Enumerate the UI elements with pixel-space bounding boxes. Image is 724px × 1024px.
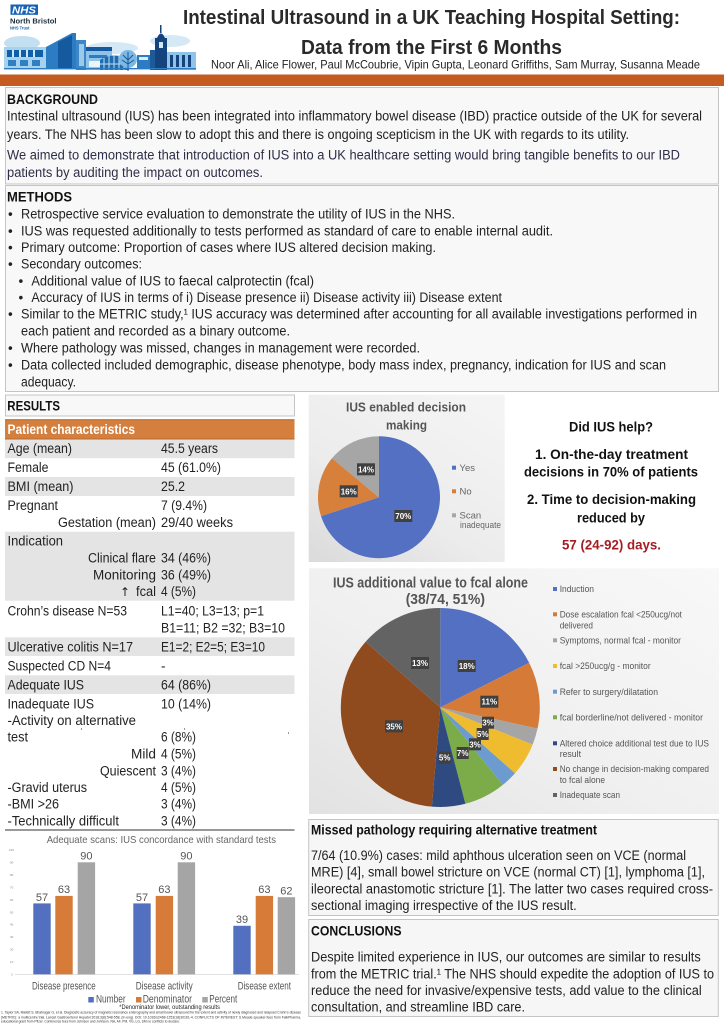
panel: missed pathology: [309, 820, 718, 916]
pie value labels: 5%: [477, 730, 488, 739]
table: patient characteristics: [5, 419, 294, 830]
table header: Patient characteristics: [8, 422, 135, 437]
table rows: ↑: [120, 585, 130, 599]
table rows: Adequate IUS: [8, 677, 84, 692]
chart: IUS enabled decision making pie: [309, 395, 505, 562]
table rows: 34 (46%): [161, 551, 211, 566]
pie title: [333, 575, 528, 608]
pie legend: fcal borderline/not delivered - monitor: [560, 712, 703, 724]
orange header band: [0, 74, 724, 86]
list: methods bullets: •: [8, 357, 13, 372]
authors: Noor Ali, Alice Flower, Paul McCoubrie, Vipin Gupta, Leonard Griffiths, Sam Murray, Susanna Meade: [211, 57, 700, 71]
pie legend: Dose escalation fcal <250ucg/not: [560, 610, 682, 620]
y axis ticks: 50: [10, 910, 14, 914]
pie value labels: 3%: [469, 740, 481, 749]
pie legend: Inadequate scan: [560, 790, 620, 801]
y axis ticks: 20: [10, 948, 14, 952]
bars: disease activity: Disease activity: [136, 980, 193, 992]
text: background body: Intestinal ultrasound (IUS) has been integrated into inflammatory bowel disease (IBD) practice outside of the UK for several: [7, 109, 702, 124]
text: conclusions body: [311, 949, 714, 1015]
pie title: IUS enabled decision: [346, 400, 466, 415]
pie value labels: 35%: [386, 722, 402, 731]
trust name: North Bristol: [10, 16, 56, 25]
table rows: -: [161, 659, 166, 674]
pie value labels: 18%: [459, 662, 475, 671]
pie legend: result: [560, 749, 581, 760]
heading box: results: [6, 395, 294, 416]
table rows: [8, 441, 285, 828]
text: missed pathology body: ileorectal anastomotic stricture [1]. The latter two cases required cross-: [311, 881, 713, 896]
list: methods bullets: Similar to the METRIC study,¹ IUS accuracy was determined after accounting for all available investigations performed in: [21, 307, 697, 322]
text: missed pathology body: [311, 848, 713, 913]
pie value labels: 14%: [358, 465, 374, 474]
pie legend: delivered: [560, 620, 593, 631]
bars: disease activity: 63: [158, 884, 171, 896]
pie value labels: 11%: [482, 698, 497, 707]
bars: disease extent: [233, 884, 295, 992]
table rows: 29/40 weeks: [161, 515, 233, 530]
y axis ticks: 70: [10, 886, 14, 890]
table rows: BMI (mean): [8, 479, 74, 494]
references and conflicts of interest: educational grant from Pfizer. Conference fees from Johnson and Johnson. NA, AF, PM, VG, LG, SM no conflicts to declare.: [1, 1020, 180, 1024]
list: methods bullets: Retrospective service evaluation to demonstrate the utility of IUS in the NHS.: [21, 206, 455, 221]
table rows: Quiescent: [100, 763, 156, 778]
bars: disease presence: 63: [58, 884, 70, 896]
table rows: 3 (4%): [161, 797, 196, 812]
table rows: 4 (5%): [161, 780, 196, 795]
pie title: IUS additional value to fcal alone: [333, 575, 528, 591]
chart: IUS additional value to fcal pie: [309, 568, 719, 814]
table rows: 6 (8%): [161, 730, 196, 745]
heading: background: BACKGROUND: [7, 91, 98, 107]
bars: disease presence: 57: [36, 892, 48, 904]
pie legend: Scan: [460, 510, 481, 522]
pie value labels: 7%: [457, 749, 468, 758]
bars: disease activity: 90: [180, 850, 193, 862]
list: methods bullets: •: [18, 290, 24, 305]
chart title: Adequate scans: IUS concordance with standard tests: [47, 834, 276, 846]
table rows: 7 (9.4%): [161, 498, 207, 513]
table rows: 4 (5%): [161, 584, 196, 599]
table rows: -Gravid uterus: [8, 780, 87, 795]
table rows: 3 (4%): [161, 813, 196, 828]
table rows: Mild: [131, 747, 156, 762]
list: methods bullets: each patient and recorded as a binary outcome.: [21, 323, 290, 338]
table rows: 64 (86%): [161, 677, 211, 692]
table rows: Monitoring: [93, 567, 156, 582]
y axis ticks: 10: [10, 960, 14, 964]
pie legend: inadequate: [460, 520, 501, 531]
text: missed pathology body: 7/64 (10.9%) cases: mild aphthous ulceration seen on VCE (normal: [311, 848, 686, 863]
list: methods bullets: Where pathology was missed, changes in management were recorded.: [21, 341, 420, 356]
title: Data from the First 6 Months: [301, 36, 562, 59]
table rows: Indication: [8, 533, 63, 548]
text: conclusions body: Despite limited experience in IUS, our outcomes are similar to results: [311, 949, 701, 964]
heading: conclusions: CONCLUSIONS: [311, 922, 402, 938]
table rows: Inadequate IUS: [8, 696, 94, 711]
list: methods bullets: •: [8, 223, 13, 238]
pie legend: [553, 584, 709, 801]
table rows: 4 (5%): [161, 747, 196, 762]
callout: did IUS help: 57 (24-92) days.: [562, 537, 661, 552]
heading box: results: RESULTS: [7, 398, 60, 414]
chart footnote: *Denominator lower, outstanding results: [119, 1005, 220, 1011]
list: methods bullets: Additional value of IUS to faecal calprotectin (fcal): [31, 273, 314, 288]
table rows: test: [8, 730, 28, 745]
list: methods bullets: adequacy.: [21, 375, 76, 390]
pie value labels: 5%: [439, 754, 450, 763]
table header: [5, 419, 294, 440]
pie legend: to fcal alone: [560, 775, 605, 786]
text: aim: patients by auditing the impact on outcomes.: [7, 165, 263, 180]
list: methods bullets: •: [8, 240, 13, 255]
y axis ticks: 90: [10, 860, 14, 864]
callout: did IUS help: decisions in 70% of patients: [524, 465, 698, 480]
logo: North Bristol NHS Trust: [4, 4, 196, 71]
heading: methods: METHODS: [7, 189, 72, 205]
callout: did IUS help: 1. On-the-day treatment: [535, 447, 689, 462]
chart: IUS concordance bar chart: [9, 834, 299, 1011]
table rows: 36 (49%): [161, 567, 211, 582]
y axis ticks: 100: [9, 848, 14, 852]
callout: did IUS help: Did IUS help?: [569, 420, 653, 435]
table rows: -BMI >26: [8, 797, 59, 812]
pie legend: Induction: [560, 584, 594, 595]
y axis ticks: 40: [10, 923, 14, 927]
y axis ticks: 60: [10, 898, 14, 902]
pie value labels: 3%: [482, 719, 494, 728]
table rows: -Technically difficult: [8, 813, 119, 828]
text: background body: years. The NHS has been slow to adopt this and there is ongoing scepticism in the UK with regards to its utility.: [7, 127, 629, 142]
table rows: Ulcerative colitis N=17: [8, 639, 133, 654]
callout: did IUS help: reduced by: [577, 511, 645, 526]
panel: conclusions: [309, 920, 718, 1016]
pie slices: [341, 608, 540, 807]
references and conflicts of interest: (METRIC): a multicentre trial. Lancet Gastroenterol Hepatol 2018;3(8):548-558. (In eng). DOI: 10.1016/s2468-1253(18)30161-4. CONFLICTS OF INTEREST: S.Meade speaker fees from FalkPharma,: [1, 1015, 301, 1019]
pie legend: No: [460, 486, 472, 498]
text: background body: [7, 109, 702, 142]
table rows: Female: [8, 460, 48, 475]
references and conflicts of interest: [1, 1011, 301, 1024]
y axis ticks: [9, 848, 14, 976]
list: methods bullets: •: [8, 257, 13, 272]
list: methods bullets: •: [18, 273, 24, 288]
table rows: 25.2: [161, 479, 185, 494]
text: missed pathology body: sectional imaging irrespective of the IUS result.: [311, 898, 577, 913]
callout: did IUS help: [524, 420, 698, 552]
pie legend: Refer to surgery/dilatation: [560, 687, 658, 698]
title: Intestinal Ultrasound in a UK Teaching Hospital Setting:: [183, 6, 680, 29]
bars: disease activity: 57: [136, 892, 148, 904]
text: missed pathology body: MRE) [4], small bowel stricture on VCE (normal CT) [1], lymphoma [1],: [311, 865, 705, 880]
table rows: Age (mean): [8, 441, 72, 456]
y axis ticks: 0: [11, 972, 13, 976]
pie value labels: 16%: [341, 487, 357, 496]
title: [183, 6, 680, 59]
list: methods bullets: [8, 206, 697, 390]
list: methods bullets: Accuracy of IUS in terms of i) Disease presence ii) Disease activity iii) Disease extent: [31, 290, 502, 305]
text: conclusions body: reduce the need for invasive/expensive tests, add value to the clinical: [311, 983, 702, 998]
list: methods bullets: •: [8, 341, 13, 356]
list: methods bullets: •: [8, 307, 13, 322]
table rows: 3 (4%): [161, 763, 196, 778]
table rows: fcal: [136, 584, 156, 599]
y axis ticks: 80: [10, 873, 14, 877]
pie legend: fcal >250ucg/g - monitor: [560, 661, 651, 672]
table rows: 45 (61.0%): [161, 460, 221, 475]
pie title: [346, 400, 466, 432]
panel: methods: [6, 186, 718, 392]
heading: missed pathology: Missed pathology requiring alternative treatment: [311, 823, 597, 838]
pie value labels: 70%: [395, 512, 411, 521]
table rows: 45.5 years: [161, 441, 218, 456]
chart legend: Denominator: [143, 994, 192, 1006]
chart legend: Number: [96, 994, 126, 1006]
text: aim: [7, 148, 680, 180]
pie legend: Yes: [460, 463, 475, 474]
pie value labels: [385, 657, 498, 764]
pie value labels: [340, 463, 412, 522]
pie legend: Altered choice additional test due to IUS: [560, 738, 709, 750]
list: methods bullets: Primary outcome: Proportion of cases where IUS altered decision making.: [21, 240, 436, 255]
table rows: E1=2; E2=5; E3=10: [161, 639, 265, 654]
table rows: 10 (14%): [161, 696, 211, 711]
table rows: -Activity on alternative: [8, 713, 136, 728]
table rows: Suspected CD N=4: [8, 659, 111, 674]
panel: background: [6, 88, 718, 184]
list: methods bullets: Data collected included demographic, disease phenotype, body mass index, pregnancy, indication for IUS and scan: [21, 357, 666, 372]
references and conflicts of interest: 1. Taylor SA, Mallett S, Bhatnagar G, et al. Diagnostic accuracy of magnetic resonance enterography and small bowel ultrasound for the extent and activity of newly diagnosed and relapsed Crohn’s disease: [1, 1011, 301, 1015]
list: methods bullets: •: [8, 206, 13, 221]
table rows: Clinical flare: [88, 551, 156, 566]
table rows: B1=11; B2 =32; B3=10: [161, 621, 285, 636]
y axis ticks: 30: [10, 935, 14, 939]
bars: disease presence: Disease presence: [32, 980, 96, 992]
chart legend: [88, 994, 237, 1006]
pie value labels: 13%: [412, 659, 428, 668]
table rows: L1=40; L3=13; p=1: [161, 603, 264, 618]
text: conclusions body: consultation, and streamline IBD care.: [311, 1000, 525, 1015]
icon: hospital skyline: [4, 25, 196, 71]
table rows: Crohn’s disease N=53: [8, 603, 127, 618]
table rows: Pregnant: [8, 498, 58, 513]
bars: disease extent: Disease extent: [238, 980, 291, 992]
bars: disease extent: 39: [236, 914, 248, 926]
bars: disease extent: 63: [258, 884, 271, 896]
bars: disease activity: [133, 850, 195, 992]
list: methods bullets: Secondary outcomes:: [21, 257, 142, 272]
pie slices: [318, 436, 440, 558]
icon: NHS lozenge: NHS: [12, 5, 36, 17]
bars: disease presence: [32, 850, 96, 992]
bars: disease extent: 62: [280, 886, 293, 898]
chart legend: Percent: [209, 994, 237, 1006]
pie title: making: [386, 417, 427, 432]
pie legend: [452, 463, 501, 531]
table rows: Gestation (mean): [58, 515, 156, 530]
trust subtitle: NHS Trust: [10, 26, 30, 32]
pie legend: Symptoms, normal fcal - monitor: [560, 636, 681, 646]
text: aim: We aimed to demonstrate that introduction of IUS into a UK healthcare setting would bring tangible benefits to our IBD: [7, 148, 680, 162]
callout: did IUS help: 2. Time to decision-making: [527, 492, 696, 507]
pie title: (38/74, 51%): [406, 592, 485, 608]
list: methods bullets: IUS was requested additionally to tests performed as standard of care to enable internal audit.: [21, 223, 553, 238]
bars: disease presence: 90: [80, 850, 93, 862]
